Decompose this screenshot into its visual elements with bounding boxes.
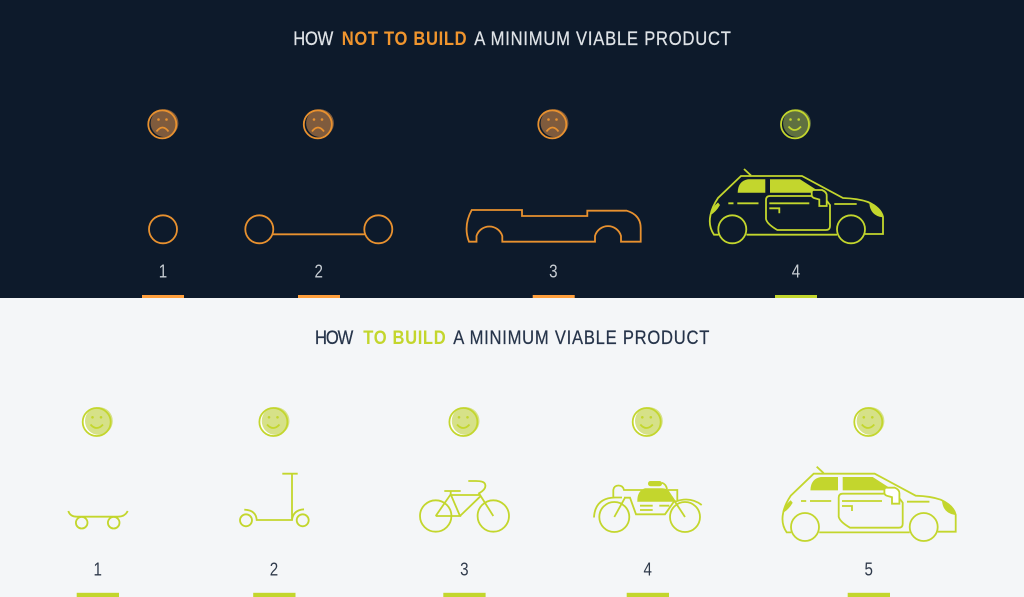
- bar 3: [443, 593, 486, 597]
- number 2: 2: [270, 559, 278, 580]
- number 4: 4: [643, 559, 652, 580]
- icon: car: [782, 467, 956, 541]
- heading: how not to build: A MINIMUM VIABLE PRODUCT: [474, 28, 731, 49]
- icon: finished car: [710, 169, 883, 243]
- heading: how to build: A MINIMUM VIABLE PRODUCT: [453, 327, 709, 348]
- icon: sad face 2: [304, 109, 334, 138]
- icon: two wheels and axle: [245, 215, 392, 243]
- icon: happy face 3: [449, 407, 480, 436]
- bar 1: [142, 295, 184, 298]
- number 1: 1: [159, 261, 167, 282]
- icon: skateboard: [68, 511, 128, 528]
- icon: motorcycle: [594, 481, 702, 532]
- heading: how to build: TO BUILD: [363, 327, 446, 348]
- icon: happy face 2: [259, 407, 290, 436]
- number 4: 4: [792, 261, 800, 282]
- icon: car chassis: [467, 210, 641, 242]
- heading: how to build: HOW: [315, 327, 353, 348]
- icon: happy face 1: [83, 407, 113, 436]
- icon: happy face 4: [781, 109, 811, 138]
- heading: how not to build: HOW: [293, 28, 333, 49]
- icon: single wheel: [149, 215, 177, 243]
- number 3: 3: [460, 559, 469, 580]
- bar 4: [627, 593, 669, 597]
- number 3: 3: [549, 261, 558, 282]
- number 1: 1: [93, 559, 102, 580]
- heading: how not to build: [293, 28, 731, 49]
- bar 4: [775, 295, 817, 298]
- bar 5: [848, 593, 890, 597]
- panel: how to build: [0, 298, 1024, 597]
- bar 1: [77, 593, 119, 597]
- panel: how not to build: [0, 0, 1024, 298]
- icon: bicycle: [420, 481, 509, 532]
- heading: how not to build: NOT TO BUILD: [342, 28, 467, 49]
- bar 3: [533, 295, 575, 298]
- icon: sad face 1: [148, 109, 178, 138]
- number 2: 2: [314, 261, 323, 282]
- bar 2: [298, 295, 340, 298]
- heading: how to build: [315, 327, 709, 348]
- icon: scooter: [240, 474, 309, 526]
- number 5: 5: [864, 559, 873, 580]
- bar 2: [253, 593, 296, 597]
- icon: sad face 3: [538, 109, 568, 138]
- icon: happy face 4: [633, 407, 663, 436]
- icon: happy face 5: [854, 407, 884, 436]
